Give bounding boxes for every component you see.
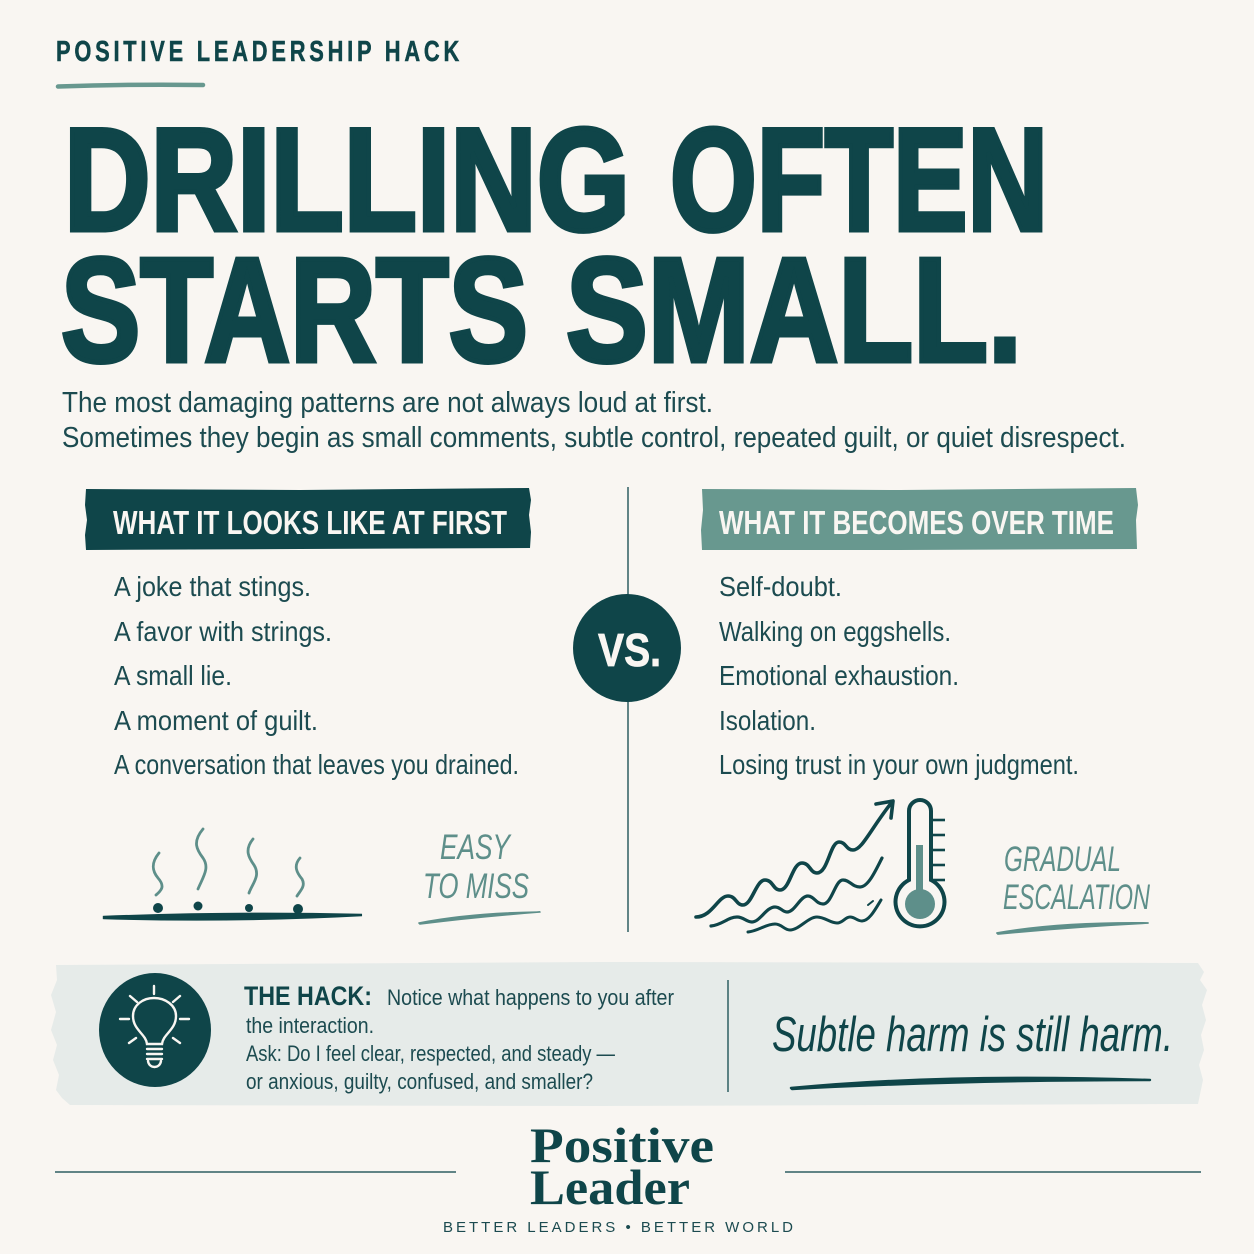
handwritten callout	[772, 1008, 1173, 1089]
icon: lightbulb	[99, 973, 211, 1087]
label: gradual escalation: GRADUAL	[1004, 840, 1121, 879]
eyebrow heading: POSITIVE LEADERSHIP HACK	[56, 36, 463, 68]
right header banner	[701, 488, 1138, 550]
hack text: THE HACK:	[244, 981, 372, 1011]
subtitle: The most damaging patterns are not always loud at first.	[62, 387, 713, 419]
eyebrow underline	[58, 85, 203, 86]
label: gradual escalation: ESCALATION	[1003, 878, 1150, 917]
panel: what it looks like at first	[85, 488, 540, 924]
label: easy to miss	[419, 828, 540, 924]
subtitle	[62, 387, 1126, 454]
icon: escalating waves with arrow	[696, 801, 893, 932]
hack text: Notice what happens to you after	[387, 985, 674, 1010]
hack divider	[727, 980, 729, 1092]
logo: Leader	[530, 1159, 690, 1215]
label: gradual escalation	[997, 840, 1150, 934]
title: DRILLING	[64, 98, 630, 261]
left list	[114, 571, 519, 780]
hack text: Ask: Do I feel clear, respected, and steady —	[246, 1041, 615, 1066]
label: easy to miss: EASY	[440, 828, 512, 867]
hack background strip	[51, 962, 1207, 1106]
left list: A moment of guilt.	[114, 705, 318, 736]
subtitle: Sometimes they begin as small comments, subtle control, repeated guilt, or quiet disrespect.	[62, 422, 1126, 454]
hack text	[244, 981, 674, 1094]
title: SMALL.	[566, 228, 1022, 393]
footer rules	[55, 1171, 1201, 1173]
hack text: the interaction.	[246, 1013, 374, 1038]
hack text: or anxious, guilty, confused, and smaller?	[246, 1069, 593, 1094]
right list: Isolation.	[719, 705, 816, 736]
right list: Emotional exhaustion.	[719, 660, 959, 691]
center divider	[627, 487, 629, 932]
title	[61, 98, 1048, 393]
left list: A small lie.	[114, 660, 232, 691]
vs badge: VS.	[598, 624, 661, 676]
right list: Losing trust in your own judgment.	[719, 749, 1079, 780]
right list: Self-doubt.	[719, 571, 842, 602]
icon: small dots with rising wisps	[104, 829, 362, 919]
right list	[719, 571, 1079, 780]
left list: A joke that stings.	[114, 571, 311, 602]
logo	[530, 1117, 714, 1215]
left header banner	[85, 488, 531, 550]
right header banner: WHAT IT BECOMES OVER TIME	[719, 504, 1114, 541]
panel: what it becomes over time	[696, 488, 1150, 934]
left list: A favor with strings.	[114, 616, 332, 647]
left list: A conversation that leaves you drained.	[114, 749, 519, 780]
right list: Walking on eggshells.	[719, 616, 951, 647]
tagline: BETTER LEADERS • BETTER WORLD	[443, 1219, 793, 1236]
label: easy to miss: TO MISS	[423, 867, 529, 906]
title: OFTEN	[670, 98, 1048, 261]
left header banner: WHAT IT LOOKS LIKE AT FIRST	[113, 504, 507, 541]
logo: Positive	[530, 1117, 714, 1173]
panel: the hack	[51, 962, 1207, 1106]
icon: thermometer	[895, 800, 945, 926]
title: STARTS	[61, 228, 528, 393]
vs badge	[573, 594, 681, 702]
